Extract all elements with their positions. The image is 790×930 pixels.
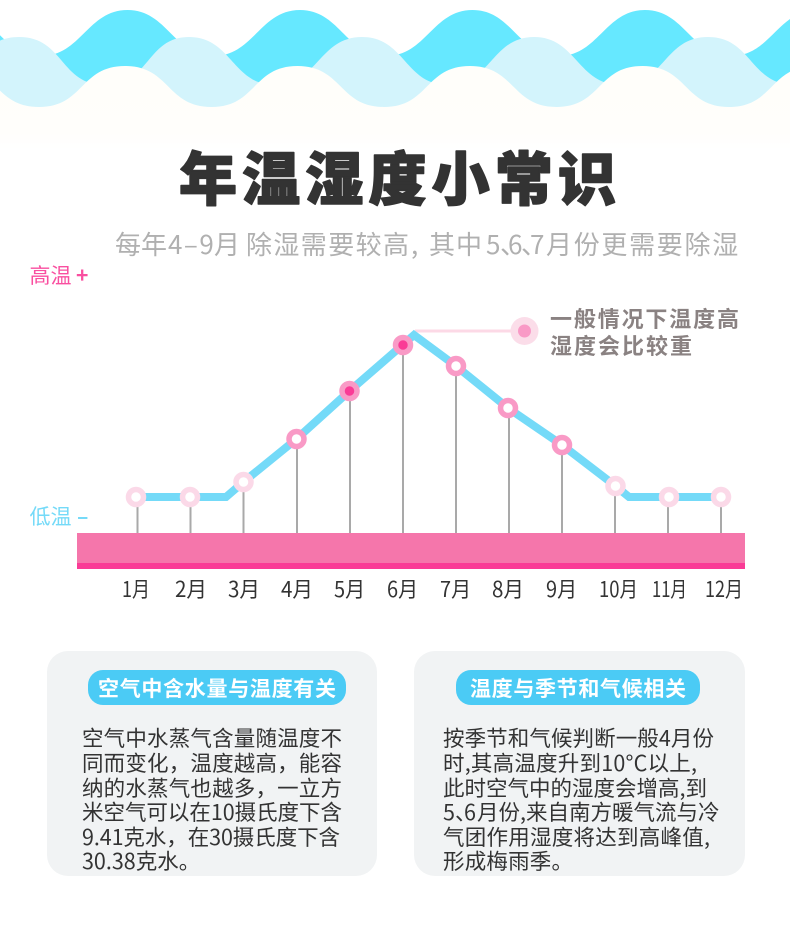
body text: 5 [443,796,455,827]
body text: 30.38克水。 [82,845,200,876]
body text: 月份,来自南方暖气流与冷 [477,796,719,827]
month stems [138,345,721,533]
subtitle: 除湿需要较高 [246,225,410,262]
axis label: high temperature: 高温 [30,260,72,290]
pill heading: 空气中含水量与温度有关 [98,673,336,703]
subtitle: , [411,225,418,262]
body text: 按季节和气候判断一般4月份 [443,722,714,753]
callout text: 一般情况下温度高 [550,302,739,334]
month labels: 1月 [122,573,150,604]
axis label: low temperature: 低温 [30,501,72,531]
body text: 9.41克水，在30摄氏度下含 [82,821,340,852]
subtitle: 、 [500,225,526,262]
callout: humidity note [510,302,739,361]
subtitle: 4–9 [168,225,215,262]
cream front wave [0,66,790,150]
axis label: high temperature: + [76,260,88,290]
callout dot [510,317,538,345]
subtitle: 、 [521,225,547,262]
month labels: 9月 [546,573,577,604]
wave header [0,10,790,150]
body text: 气团作用湿度将达到高峰值, [443,821,710,852]
subtitle: 月 [214,225,240,262]
callout connector line [415,330,515,332]
body text [82,722,342,876]
month labels: 2月 [175,573,207,604]
temperature line [136,335,721,497]
month labels: 6月 [387,573,418,604]
month labels: 12月 [705,573,743,604]
body text: 同而变化，温度越高，能容 [82,747,342,778]
body text: 形成梅雨季。 [443,845,573,876]
month markers [128,338,728,504]
pill heading: 温度与季节和气候相关 [470,673,686,703]
month labels: 7月 [440,573,471,604]
body text: 空气中水蒸气含量随温度不 [82,722,342,753]
subtitle: 每年 [115,225,167,262]
month labels [122,573,743,604]
month labels: 4月 [281,573,313,604]
base bar [77,533,745,569]
month labels: 3月 [228,573,260,604]
body text: 米空气可以在10摄氏度下含 [82,796,342,827]
cyan back wave [0,10,790,120]
panel: season and climate [414,651,745,876]
callout text [550,302,739,361]
callout text: 湿度会比较重 [550,329,692,361]
subtitle: 月份更需要除湿 [546,225,740,262]
body text [443,722,719,876]
panel: air moisture [47,651,377,876]
subtitle: 6 [508,225,522,262]
body text: 纳的水蒸气也越多，一立方 [82,772,342,803]
month labels: 8月 [492,573,524,604]
month labels: 10月 [599,573,638,604]
subtitle: 其中 [429,225,483,262]
body text: 、 [455,796,477,827]
subtitle: 5 [486,225,500,262]
month labels: 11月 [652,573,687,604]
body text: 此时空气中的湿度会增高,到 [443,772,707,803]
title: 年温湿度小常识 [179,133,616,217]
body text: 6 [464,796,476,827]
body text: 时,其高温度升到10°C以上, [443,747,697,778]
month labels: 5月 [334,573,365,604]
subtitle: 7 [530,225,544,262]
axis label: low temperature: – [77,501,88,531]
line chart: yearly temperature and humidity [77,331,745,604]
light blue middle wave [0,37,790,130]
